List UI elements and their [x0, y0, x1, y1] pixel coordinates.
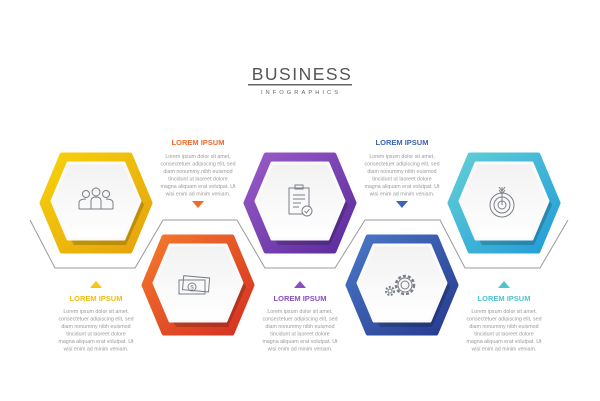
text block: purple (bottom): wisi enim ad minim veniam.: [268, 346, 332, 352]
text block: yellow (bottom): LOREM IPSUM: [70, 294, 122, 303]
text block: blue (top): [364, 138, 440, 208]
text block: orange (top): consectetuer adipiscing elit, sed: [160, 162, 236, 168]
text block: orange (top): Lorem ipsum dolor sit amet,: [165, 154, 231, 160]
text block: orange (top): LOREM IPSUM: [172, 138, 224, 147]
text block: orange (top): wisi enim ad minim veniam.: [166, 192, 230, 198]
text block: purple (bottom): Lorem ipsum dolor sit amet,: [267, 309, 333, 315]
hexagon 3: purple checklist: [246, 155, 354, 251]
text block: teal (bottom): consectetuer adipiscing elit, sed: [466, 316, 542, 322]
text block: teal (bottom): [466, 281, 542, 352]
icon: clipboard: [289, 185, 312, 216]
text block: blue (top): consectetuer adipiscing elit, sed: [364, 162, 440, 168]
title: [248, 64, 352, 96]
text block: teal (bottom): tincidunt ut laoreet dolore: [474, 332, 534, 338]
hexagon 5: teal target: [450, 155, 558, 251]
hexagon 1: yellow team: [42, 155, 150, 251]
text block: purple (bottom): consectetuer adipiscing elit, sed: [262, 316, 338, 322]
text block: yellow (bottom): diam nonummy nibh euismod: [61, 324, 131, 330]
text block: yellow (bottom): [58, 281, 134, 352]
text block: blue (top): tincidunt ut laoreet dolore: [372, 176, 432, 182]
text block: teal (bottom): Lorem ipsum dolor sit amet,: [471, 309, 537, 315]
icon: people: [79, 188, 113, 209]
hexagon 4: blue gears: [348, 237, 456, 333]
text block: blue (top): wisi enim ad minim veniam.: [370, 192, 434, 198]
text block: teal (bottom): LOREM IPSUM: [478, 294, 530, 303]
text block: orange (top): [160, 138, 236, 208]
title: BUSINESS: [252, 64, 352, 84]
text block: orange (top): tincidunt ut laoreet dolore: [168, 176, 228, 182]
text block: orange (top): diam nonummy nibh euismod: [163, 169, 233, 175]
text block: purple (bottom): diam nonummy nibh euismod: [265, 324, 335, 330]
icon: gears: [386, 276, 414, 295]
text block: teal (bottom): diam nonummy nibh euismod: [469, 324, 539, 330]
text block: yellow (bottom): wisi enim ad minim veniam.: [64, 346, 128, 352]
text block: blue (top): LOREM IPSUM: [376, 138, 428, 147]
icon: money: $: [190, 286, 194, 292]
text block: yellow (bottom): Lorem ipsum dolor sit amet,: [63, 309, 129, 315]
text block: teal (bottom): wisi enim ad minim veniam.: [472, 346, 536, 352]
text block: blue (top): magna aliquam erat volutpat. Ut: [364, 184, 440, 190]
text block: purple (bottom): tincidunt ut laoreet dolore: [270, 332, 330, 338]
text block: yellow (bottom): consectetuer adipiscing elit, sed: [58, 316, 134, 322]
text block: blue (top): Lorem ipsum dolor sit amet,: [369, 154, 435, 160]
text block: yellow (bottom): magna aliquam erat volutpat. Ut: [58, 339, 134, 345]
text block: yellow (bottom): tincidunt ut laoreet dolore: [66, 332, 126, 338]
text block: purple (bottom): LOREM IPSUM: [274, 294, 326, 303]
text block: purple (bottom): [262, 281, 338, 352]
zigzag connector line: [30, 220, 568, 268]
title: INFOGRAPHICS: [261, 90, 341, 96]
text block: orange (top): magna aliquam erat volutpat. Ut: [160, 184, 236, 190]
text block: blue (top): diam nonummy nibh euismod: [367, 169, 437, 175]
text block: teal (bottom): magna aliquam erat volutpat. Ut: [466, 339, 542, 345]
hexagon 2: orange money: [144, 237, 252, 333]
icon: target: [490, 187, 514, 217]
text block: purple (bottom): magna aliquam erat volutpat. Ut: [262, 339, 338, 345]
